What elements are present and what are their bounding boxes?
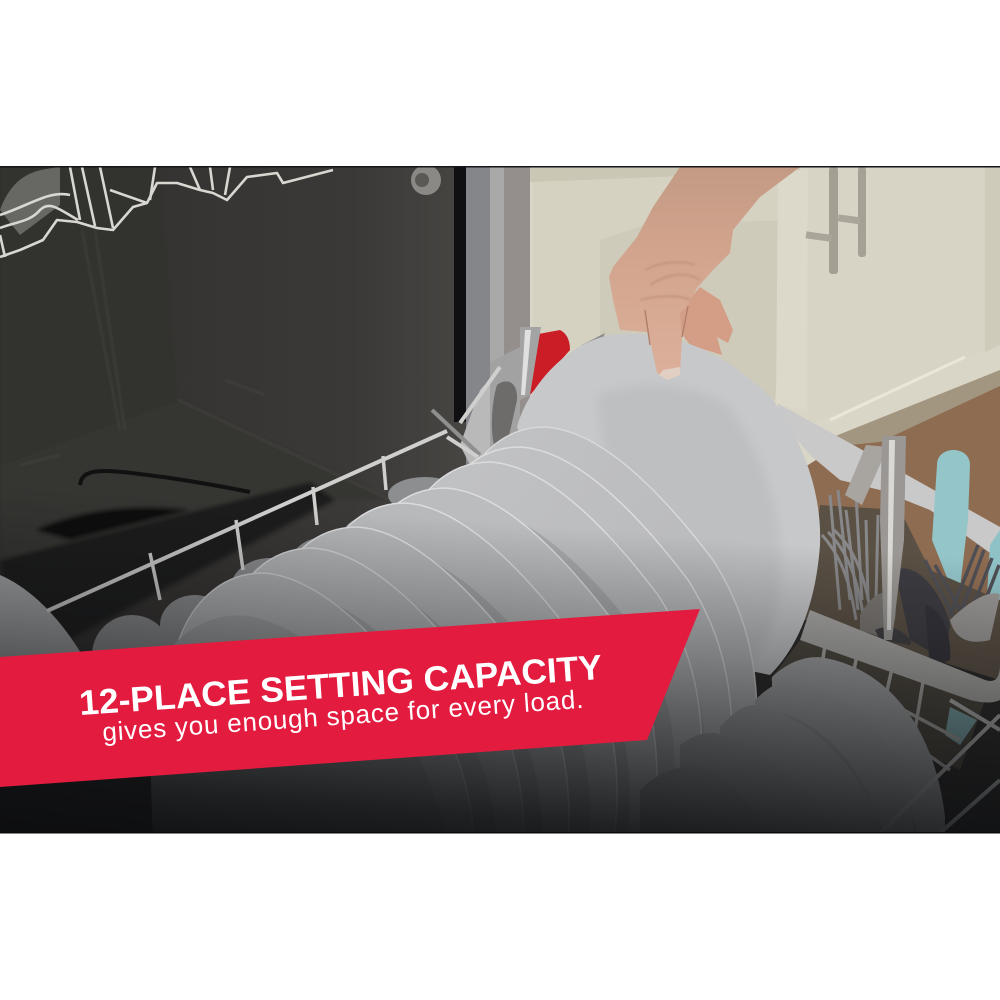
cutlery basket rim (800, 610, 1000, 702)
plate A (772, 657, 945, 840)
top image border (0, 166, 1000, 168)
plate 8 (151, 572, 468, 820)
knife handles (845, 436, 906, 640)
upper dish rack (0, 167, 333, 257)
plate 3 (428, 461, 702, 734)
infographic canvas (0, 166, 1000, 834)
bottom image border (0, 832, 1000, 834)
heading: 12-PLACE SETTING CAPACITY (78, 648, 603, 723)
grid bars (821, 648, 960, 772)
teal handle (932, 450, 970, 583)
plate 5 (346, 502, 618, 814)
cutlery basket grid (770, 640, 985, 770)
plate B (755, 686, 772, 710)
photo scene (0, 168, 1000, 832)
rear dish rack rail (777, 403, 1000, 560)
door edge and trim (454, 167, 532, 467)
red spatula (530, 330, 570, 395)
back basket wall (460, 347, 520, 465)
plate D (680, 733, 840, 840)
silverware: forks and spoons (805, 490, 1000, 680)
fingers behind plate (680, 287, 733, 355)
lower-right plates (640, 657, 945, 840)
plate 4 (397, 487, 658, 776)
far-left plate (0, 575, 80, 657)
dishwasher interior (0, 168, 466, 635)
small plates behind the rack (92, 477, 440, 651)
plate C (720, 705, 880, 840)
wooden floor (800, 384, 1000, 620)
plate 7 (252, 547, 522, 801)
banner shape (0, 609, 700, 787)
plate 1 (483, 426, 758, 715)
kitchen cabinets (530, 167, 1000, 467)
front wires over lower right (880, 700, 1000, 833)
hero plate (517, 334, 820, 675)
teal seen through grid (945, 707, 977, 745)
subheading: gives you enough space for every load. (101, 684, 584, 747)
plate A well (800, 690, 918, 840)
scene base (754, 620, 1000, 832)
plate 2 (470, 446, 732, 716)
utensil handles in back basket (432, 327, 605, 455)
red banner (0, 609, 700, 787)
plate 6 (302, 526, 570, 810)
second teal handle (987, 530, 1000, 600)
plate B well (770, 710, 885, 840)
bottom fade overlay (0, 167, 1000, 833)
hand (609, 167, 800, 380)
plate stack (151, 426, 758, 832)
front rack wire (47, 367, 500, 611)
plate E (640, 767, 770, 840)
